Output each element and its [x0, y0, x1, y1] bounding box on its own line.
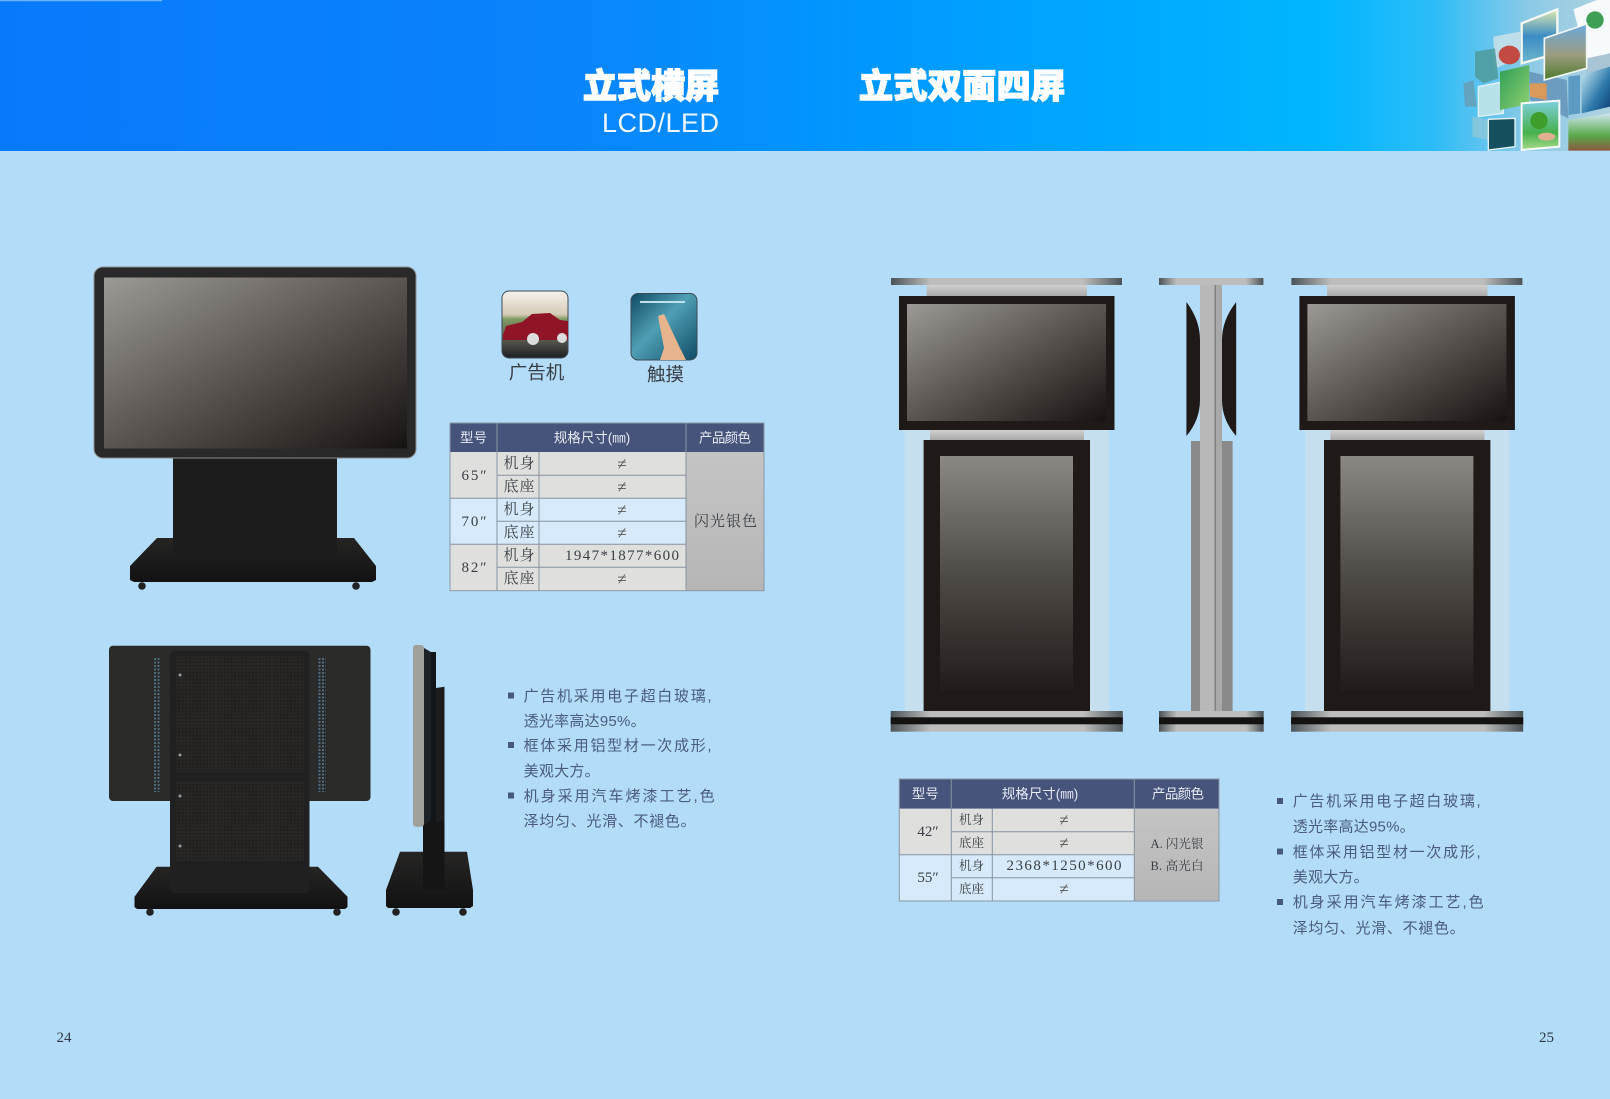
- spec table: left page: [450, 423, 764, 591]
- spec table: right page: 机身: [959, 812, 984, 827]
- upper monitor: [1299, 296, 1515, 430]
- spec table: left page: 65″: [462, 468, 486, 484]
- spec table: left page: 产品颜色: [699, 430, 751, 446]
- top plate: [891, 278, 1122, 285]
- upper mesh panel: [176, 656, 304, 773]
- base: [1159, 711, 1264, 732]
- spec table: right page: 底座: [959, 881, 984, 896]
- spec table: left page: 闪光银色: [694, 513, 757, 530]
- base: [891, 711, 1123, 732]
- spec table: right page: ≠: [1059, 880, 1069, 898]
- title: left page: 立式横屏: [583, 59, 719, 108]
- spec table: left page: 规格尺寸(㎜): [554, 430, 630, 446]
- upper screen: [1307, 304, 1506, 421]
- spec table: left page: ≠: [617, 500, 627, 520]
- spec table: right page: ≠: [1059, 834, 1069, 852]
- black wing right: [1222, 302, 1236, 436]
- feature list: right page: 透光率高达95%。: [1293, 818, 1415, 836]
- monitor bezel: [94, 267, 416, 458]
- spec table: left page: ≠: [617, 570, 627, 588]
- spec table: left page: 底座: [504, 477, 534, 495]
- spec table: left page: 机身: [504, 501, 534, 518]
- feature list: left page: 框体采用铝型材一次成形,: [524, 738, 712, 754]
- spec table: right page: [899, 779, 1219, 901]
- column: [423, 700, 444, 890]
- label: advertising machine: 广告机: [509, 362, 565, 383]
- spec table: left page: ≠: [617, 454, 627, 474]
- base: [130, 538, 376, 582]
- product photo: side view: [386, 645, 473, 916]
- spec table: left page: 70″: [462, 514, 486, 530]
- feature list: left page: 广告机采用电子超白玻璃,: [524, 688, 712, 705]
- stand column: [173, 456, 337, 555]
- back panel: [109, 646, 370, 801]
- spec table: right page: 产品颜色: [1152, 786, 1204, 802]
- lower monitor: [924, 440, 1090, 711]
- wheels: [392, 908, 467, 916]
- subtitle: LCD/LED: LCD/LED: [602, 108, 719, 138]
- label: touch: 触摸: [647, 364, 684, 385]
- feature list: right page: 美观大方。: [1293, 869, 1369, 886]
- spec table: left page: 82″: [462, 560, 486, 576]
- lower screen: [940, 456, 1073, 691]
- center column: [1200, 285, 1222, 711]
- lower monitor: [1324, 440, 1490, 711]
- feature list: left page: 透光率高达95%。: [524, 713, 646, 730]
- product drawing: front view A: [891, 278, 1123, 732]
- spec table: left page: 机身: [504, 455, 534, 472]
- wheels: [146, 908, 341, 916]
- feature list: right page: [1277, 793, 1484, 937]
- header band: [0, 0, 1610, 151]
- lower screen: [1340, 456, 1473, 691]
- spec table: left page: 1947*1877*600: [565, 548, 679, 564]
- rear gray panel: [1191, 441, 1233, 711]
- mid connector: [1330, 430, 1484, 440]
- spec table: left page: 底座: [504, 569, 534, 587]
- spec table: right page: 2368*1250*600: [1006, 858, 1122, 874]
- spec table: right page: B. 高光白: [1150, 858, 1204, 873]
- vent strips: [153, 657, 326, 792]
- product drawing: front view C: [1291, 278, 1523, 732]
- spec table: left page: 型号: [460, 430, 487, 446]
- spec table: right page: A. 闪光银: [1150, 836, 1204, 851]
- feature list: left page: 泽均匀、光滑、不褪色。: [524, 813, 696, 830]
- base: [134, 867, 348, 909]
- top plate: [1291, 278, 1522, 285]
- glass back panel: [1305, 430, 1509, 711]
- base: [1291, 711, 1523, 732]
- column: [170, 651, 310, 893]
- glass back panel: [905, 430, 1109, 711]
- product drawing: side view B: [1159, 278, 1264, 732]
- spec table: left page: ≠: [617, 524, 627, 542]
- feature list: right page: 泽均匀、光滑、不褪色。: [1293, 920, 1465, 937]
- spec table: right page: 底座: [959, 835, 984, 850]
- spec table: right page: 42″: [917, 824, 939, 840]
- screws: [178, 674, 182, 848]
- top plate: [1159, 278, 1263, 285]
- mid connector: [930, 430, 1084, 440]
- upper monitor: [899, 296, 1114, 430]
- product photo: back view: [109, 646, 370, 916]
- spec table: right page: 55″: [917, 870, 939, 886]
- base: [386, 852, 473, 908]
- black panel: [424, 648, 431, 825]
- spec table: right page: 型号: [912, 786, 939, 802]
- page number 24: 24: [56, 1030, 72, 1046]
- feature list: left page: 美观大方。: [524, 763, 600, 780]
- upper screen: [907, 304, 1106, 421]
- product photo: front view of landscape kiosk: [94, 267, 416, 590]
- feature list: left page: [508, 688, 715, 830]
- spec table: left page: 底座: [504, 523, 534, 541]
- feature list: right page: 广告机采用电子超白玻璃,: [1293, 793, 1481, 810]
- page number 25: 25: [1539, 1030, 1554, 1046]
- feature list: right page: 框体采用铝型材一次成形,: [1293, 844, 1481, 861]
- top connector: [927, 285, 1087, 296]
- spec table: left page: 机身: [504, 547, 534, 564]
- feature list: right page: 机身采用汽车烤漆工艺,色: [1293, 894, 1484, 911]
- spec table: right page: 规格尺寸(㎜): [1002, 786, 1078, 802]
- lower mesh panel: [176, 780, 304, 862]
- spec table: left page: ≠: [617, 478, 627, 496]
- top connector: [1327, 285, 1487, 296]
- icon: advertising machine: [502, 291, 568, 358]
- black wing left: [1186, 302, 1200, 436]
- wheels: [138, 582, 360, 590]
- feature list: left page: 机身采用汽车烤漆工艺,色: [524, 788, 715, 805]
- spec table: right page: 机身: [959, 858, 984, 873]
- title: right page: 立式双面四屏: [859, 59, 1065, 108]
- silver edge: [413, 645, 424, 827]
- monitor screen: [104, 278, 407, 448]
- rear box: [436, 687, 444, 822]
- spec table: right page: ≠: [1059, 810, 1069, 830]
- icon: touch: [631, 294, 697, 360]
- header photo collage: [1463, 0, 1610, 151]
